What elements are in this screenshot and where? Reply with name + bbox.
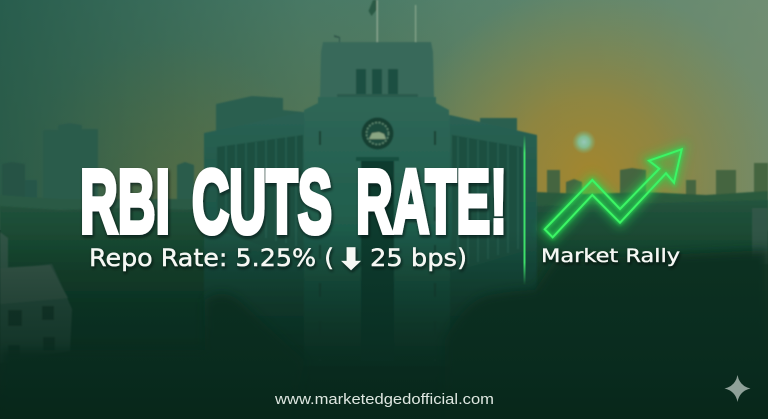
caption: market rally: Market Rally (541, 245, 680, 267)
wing window bands (217, 135, 522, 272)
left foreground building (0, 232, 72, 363)
title: CUTS (192, 152, 332, 252)
subtitle: repo rate: ⬇ (339, 244, 363, 275)
subtitle: repo rate: Repo Rate: 5.25% ( (89, 244, 334, 272)
front steps (250, 366, 500, 419)
title (80, 152, 507, 252)
foreground tree shadows (0, 250, 768, 419)
RBI emblem (362, 118, 394, 150)
right wing (450, 115, 537, 385)
title: RATE! (356, 152, 507, 252)
left wing (204, 112, 304, 395)
subtitle: repo rate (89, 244, 467, 275)
city skyline (0, 123, 768, 231)
ground greenery (0, 200, 768, 419)
bottom darkening (0, 230, 768, 419)
central tower (320, 42, 434, 97)
facade slots (320, 131, 435, 361)
tower windows (356, 69, 398, 94)
neon divider line (524, 135, 526, 285)
subtitle: repo rate: 25 bps) (370, 244, 467, 272)
central block (304, 97, 450, 368)
title: RBI (80, 152, 170, 252)
icon: neon rising arrow (545, 149, 682, 237)
website url: www.marketedgedofficial.com (274, 392, 494, 408)
background sky (0, 0, 768, 230)
flag and poles (334, 0, 416, 42)
sun (572, 130, 596, 154)
icon: sparkle (724, 375, 750, 402)
RBI headquarters building (204, 0, 537, 419)
right edge building (752, 208, 768, 264)
central entrance (361, 160, 394, 361)
rear rooftops (216, 96, 517, 136)
